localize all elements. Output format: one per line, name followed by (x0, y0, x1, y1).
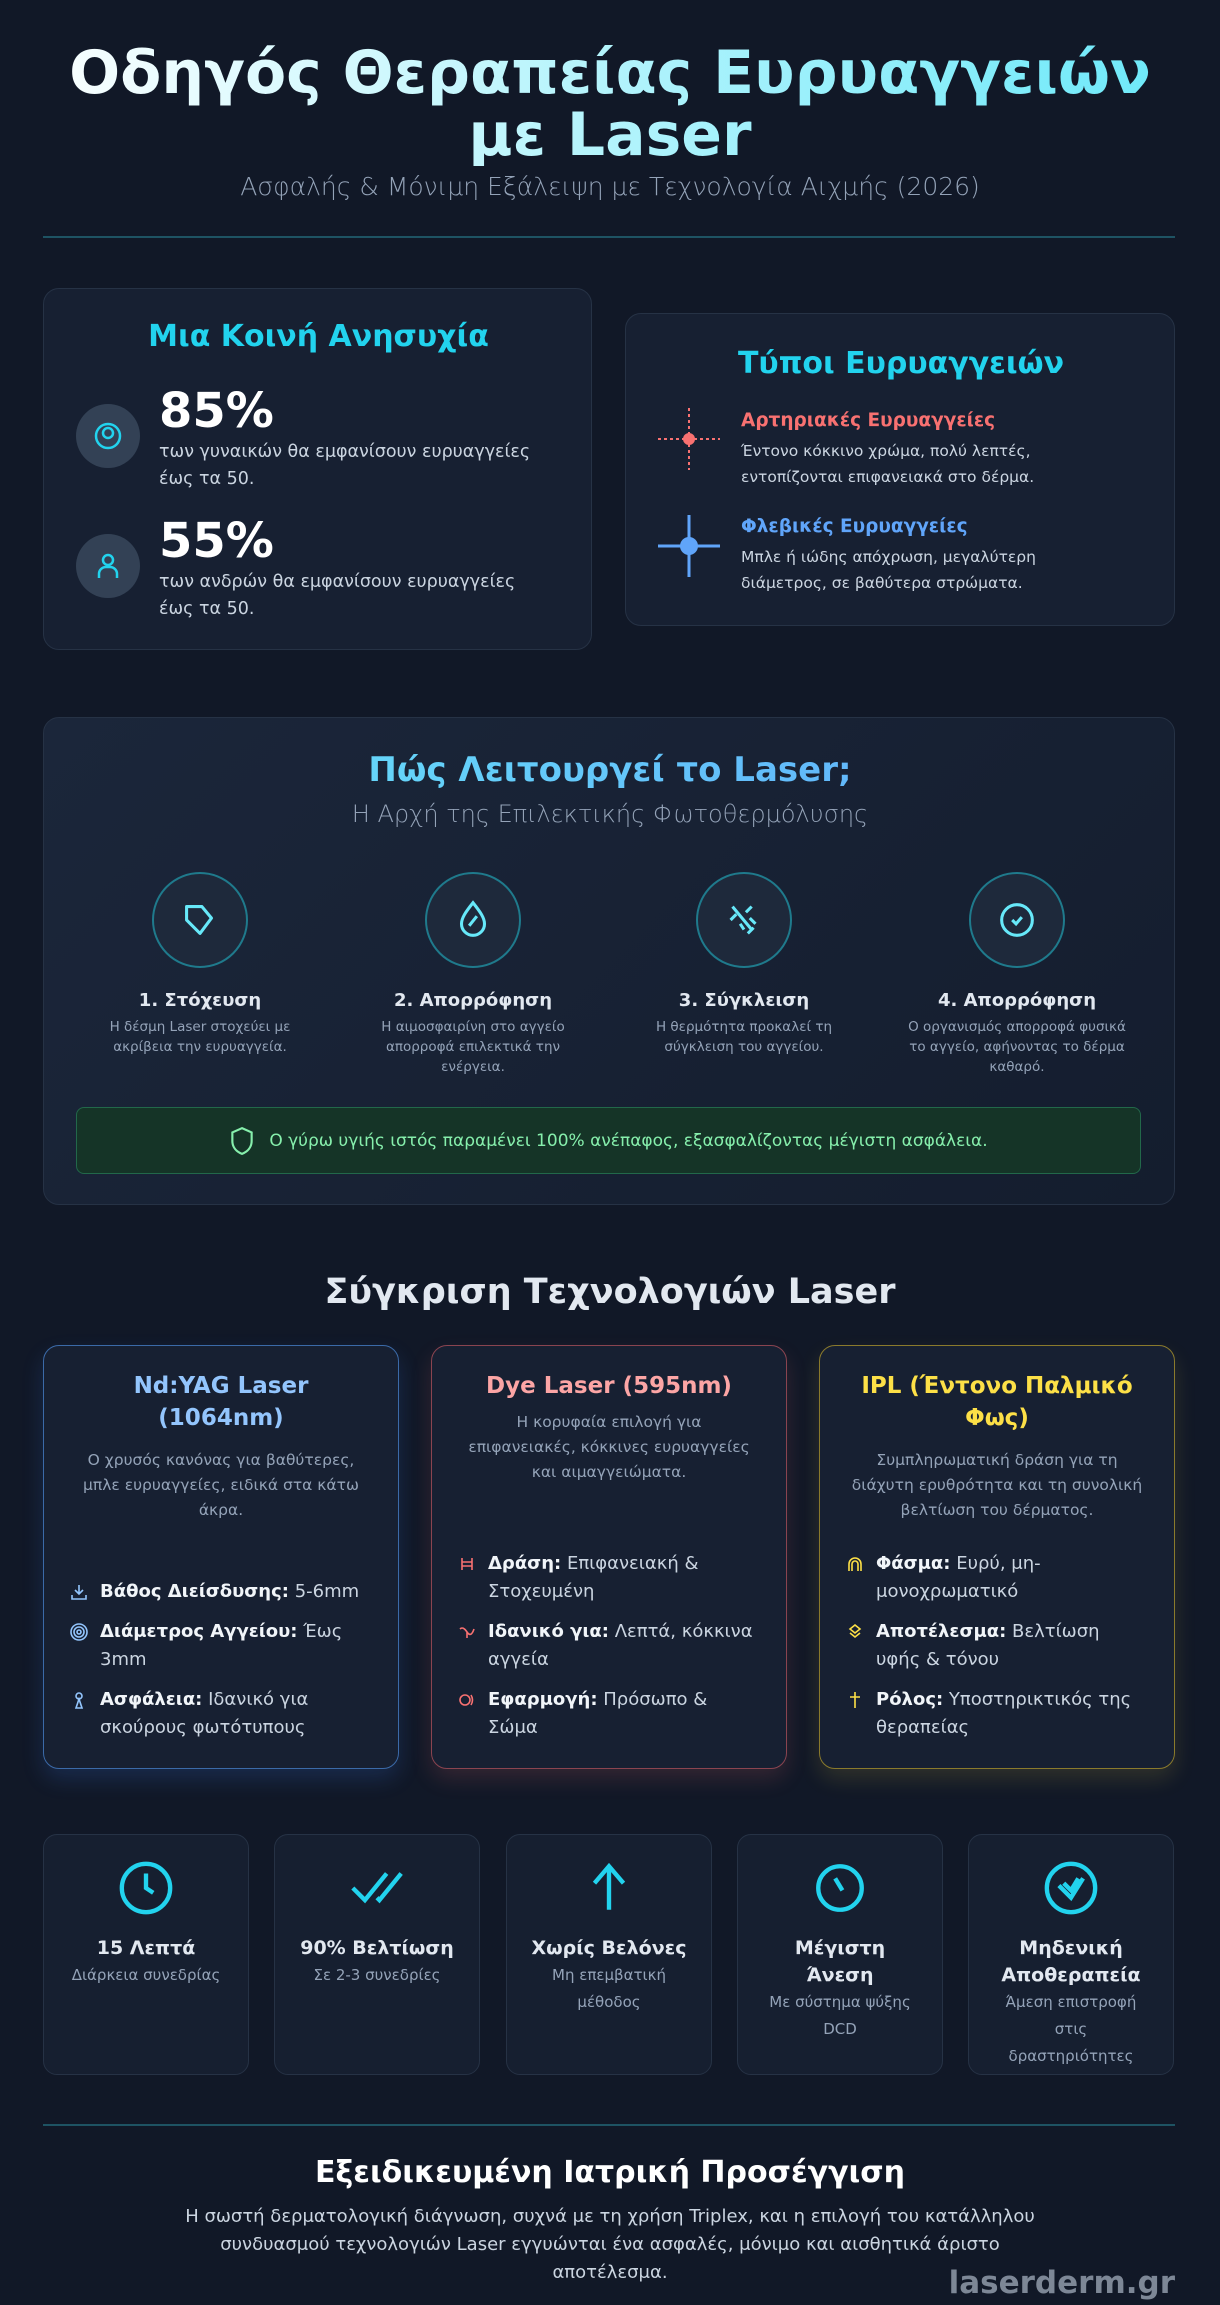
callout: safety banner (76, 1107, 1141, 1174)
stat: men: 55% (159, 513, 274, 569)
feature card: no downtime (968, 1834, 1174, 2075)
icon: check circle (969, 872, 1065, 968)
item: venous (658, 515, 1036, 592)
icon: clock (120, 1862, 172, 1914)
item: venous: Φλεβικές Ευρυαγγείες (741, 516, 968, 537)
card: IPL (819, 1345, 1175, 1769)
item: venous: Μπλε ή ιώδης απόχρωση, μεγαλύτερη διάμετρος, σε βαθύτερα στρώματα. (741, 548, 1036, 592)
feature card: comfort: Με σύστημα ψύξης DCD (769, 1993, 911, 2038)
card: Dye laser (431, 1345, 787, 1769)
card: Nd:YAG (43, 1345, 399, 1769)
step 1 (110, 872, 290, 1055)
card: Nd:YAG: Nd:YAG Laser (1064nm) (134, 1373, 308, 1431)
icon: woman (76, 404, 140, 468)
icon: shield (231, 1127, 253, 1155)
step 4 (908, 872, 1126, 1075)
item: arterial: Έντονο κόκκινο χρώμα, πολύ λεπτές, εντοπίζονται επιφανειακά στο δέρμα. (741, 442, 1034, 486)
icon: man (76, 534, 140, 598)
step 3: 3. Σύγκλειση (679, 990, 809, 1011)
step 4: 4. Απορρόφηση (938, 990, 1096, 1011)
title (0, 42, 1220, 166)
callout: safety banner: Ο γύρω υγιής ιστός παραμένει 100% ανέπαφος, εξασφαλίζοντας μέγιστη ασφάλεια. (269, 1130, 988, 1150)
feature card: 15 minutes: Διάρκεια συνεδρίας (72, 1966, 220, 1984)
feature card: 15 minutes: 15 Λεπτά (97, 1937, 195, 1959)
brand: laserderm.gr: laserderm.gr (949, 2265, 1175, 2301)
icon: closure (696, 872, 792, 968)
feature card: 90%: Σε 2-3 συνεδρίες (314, 1966, 440, 1984)
heading: how it works (44, 748, 1176, 792)
heading: concern: Μια Κοινή Ανησυχία (148, 319, 489, 354)
feature card: no needles (506, 1834, 712, 2075)
stat: women (76, 383, 530, 489)
card: IPL: Φάσμα: Ευρύ, μη-μονοχρωματικό (876, 1553, 1041, 1602)
icon: arterial (658, 408, 720, 470)
card: IPL: IPL (Έντονο Παλμικό Φως) (861, 1373, 1133, 1431)
subtitle: Ασφαλής & Μόνιμη Εξάλειψη με Τεχνολογία Αιχμής (2026) (240, 172, 980, 201)
card: IPL: Αποτέλεσμα: Βελτίωση υφής & τόνου (876, 1621, 1100, 1670)
card: IPL: Ρόλος: Υποστηρικτικός της θεραπείας (876, 1689, 1131, 1738)
subheading: Η Αρχή της Επιλεκτικής Φωτοθερμόλυσης (352, 800, 868, 828)
item: arterial: Αρτηριακές Ευρυαγγείες (741, 410, 995, 431)
icon: arrow up (592, 1863, 626, 1910)
step 1: Η δέσμη Laser στοχεύει με ακρίβεια την ευρυαγγεία. (110, 1019, 290, 1055)
card: Dye laser: Dye Laser (595nm) (486, 1373, 732, 1399)
card: Nd:YAG: Διάμετρος Αγγείου: Έως 3mm (100, 1621, 342, 1670)
step 3 (656, 872, 832, 1055)
panel: types (625, 313, 1175, 626)
step 2: 2. Απορρόφηση (394, 990, 552, 1011)
feature card: no needles: Χωρίς Βελόνες (532, 1937, 686, 1959)
icon: double check (351, 1872, 403, 1904)
feature card: no downtime: Άμεση επιστροφή στις δραστηριότητες (1006, 1993, 1136, 2065)
heading: types: Τύποι Ευρυαγγειών (738, 346, 1064, 381)
heading: how it works: Πώς Λειτουργεί το Laser; (368, 750, 852, 790)
card: IPL: Συμπληρωματική δράση για τη διάχυτη ερυθρότητα και τη συνολική βελτίωση του δέρματος. (852, 1451, 1142, 1519)
card: Nd:YAG: Ασφάλεια: Ιδανικό για σκούρους φωτότυπους (100, 1689, 308, 1738)
card: Dye laser: Η κορυφαία επιλογή για επιφανειακές, κόκκινες ευρυαγγείες και αιμαγγειώματα. (468, 1413, 750, 1481)
feature card: 15 minutes (43, 1834, 249, 2075)
icon: target tag (152, 872, 248, 968)
feature card: no downtime: Μηδενική Αποθεραπεία (1001, 1937, 1141, 1986)
footer text: Η σωστή δερματολογική διάγνωση, συχνά με τη χρήση Triplex, και η επιλογή του κατάλληλου συνδυασμού τεχνολογιών Laser εγγυώνται ένα ασφαλές, μόνιμο και αισθητικά άριστο αποτέλεσμα. (185, 2206, 1035, 2283)
panel: common concern (43, 288, 592, 650)
feature card: 90% (274, 1834, 480, 2075)
heading: comparison: Σύγκριση Τεχνολογιών Laser (324, 1272, 896, 1312)
step 2 (381, 872, 565, 1075)
step 2: Η αιμοσφαιρίνη στο αγγείο απορροφά επιλεκτικά την ενέργεια. (381, 1019, 565, 1075)
footer heading: Εξειδικευμένη Ιατρική Προσέγγιση (315, 2155, 905, 2190)
feature card: comfort (737, 1834, 943, 2075)
step 1: 1. Στόχευση (139, 990, 261, 1011)
title: Οδηγός Θεραπείας Ευρυαγγειών (69, 38, 1151, 108)
stat: men: των ανδρών θα εμφανίσουν ευρυαγγείες έως τα 50. (159, 572, 515, 619)
step 3: Η θερμότητα προκαλεί τη σύγκλειση του αγγείου. (656, 1019, 832, 1055)
item: arterial (658, 408, 1034, 486)
feature card: 90%: 90% Βελτίωση (300, 1937, 454, 1959)
icon: venous (658, 515, 720, 577)
icon: drop (425, 872, 521, 968)
feature card: comfort: Μέγιστη (795, 1937, 885, 1959)
card: Dye laser: Ιδανικό για: Λεπτά, κόκκινα αγγεία (488, 1621, 753, 1670)
card: Dye laser: Εφαρμογή: Πρόσωπο & Σώμα (488, 1689, 707, 1738)
title: με Laser (468, 100, 752, 170)
icon: check badge (1044, 1862, 1098, 1914)
stat: women: 85% (159, 383, 274, 439)
panel: how laser works (43, 717, 1175, 1205)
feature card: no needles: Μη επεμβατική μέθοδος (552, 1966, 666, 2011)
card: Nd:YAG: Ο χρυσός κανόνας για βαθύτερες, μπλε ευρυαγγείες, ειδικά στα κάτω άκρα. (83, 1451, 359, 1519)
step 4: Ο οργανισμός απορροφά φυσικά το αγγείο, αφήνοντας το δέρμα καθαρό. (908, 1019, 1126, 1075)
stat: men (76, 513, 515, 619)
card: Dye laser: Δράση: Επιφανειακή & Στοχευμένη (488, 1553, 698, 1602)
icon: gauge (816, 1864, 864, 1912)
feature card: comfort: Άνεση (806, 1964, 874, 1986)
stat: women: των γυναικών θα εμφανίσουν ευρυαγγείες έως τα 50. (159, 442, 530, 489)
card: Nd:YAG: Βάθος Διείσδυσης: 5-6mm (100, 1581, 359, 1602)
